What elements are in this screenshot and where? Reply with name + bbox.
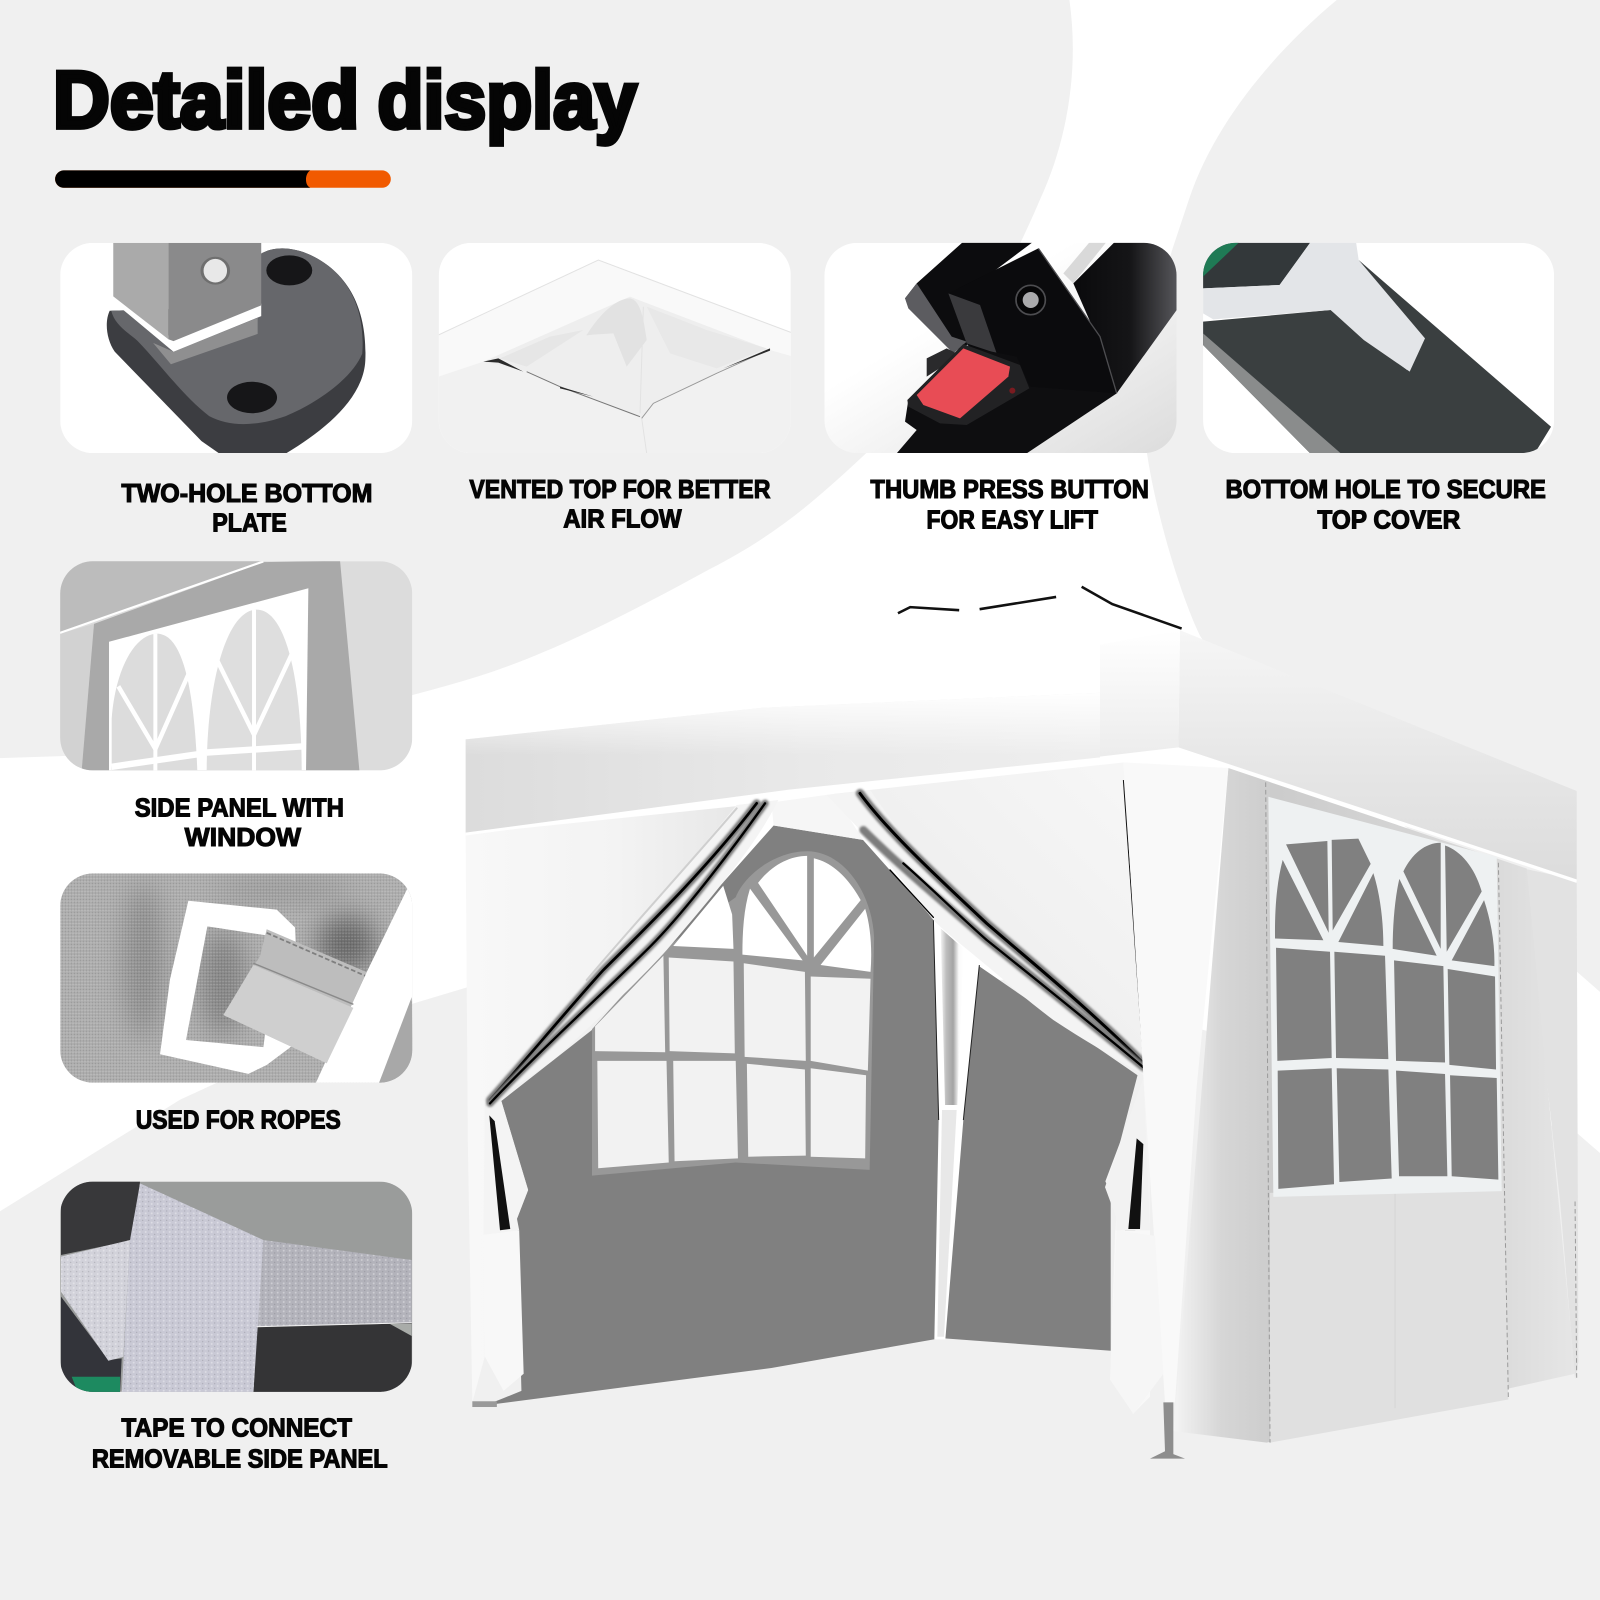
red button xyxy=(917,348,1010,418)
tent: right side xyxy=(1100,630,1578,1459)
right tied curtain xyxy=(1105,1075,1150,1230)
right curtain panel xyxy=(834,762,1144,1069)
caption: two-hole bottom plate xyxy=(121,480,372,538)
window frame xyxy=(592,851,874,1176)
right valance xyxy=(1178,630,1577,880)
caption: bottom hole top cover: TOP COVER xyxy=(1317,507,1460,535)
right tied curtain xyxy=(1105,1078,1150,1230)
corner foot xyxy=(1150,1402,1185,1459)
title xyxy=(53,56,637,146)
panel: thumb press button xyxy=(824,242,1177,453)
left foot xyxy=(472,1401,497,1407)
panel: vented top xyxy=(438,243,793,453)
caption: side panel with window: SIDE PANEL WITH xyxy=(135,794,344,822)
caption: used for ropes: USED FOR ROPES xyxy=(136,1107,341,1135)
white gap strips xyxy=(1063,242,1107,283)
valance trim xyxy=(466,754,1150,834)
rear block xyxy=(905,242,1033,352)
panel: two-hole bottom plate xyxy=(60,243,412,454)
caption: tape to connect: REMOVABLE SIDE PANEL xyxy=(92,1445,388,1473)
front bracket xyxy=(960,248,1117,394)
bolt xyxy=(1016,285,1045,315)
title underline bar xyxy=(55,170,391,188)
right trim xyxy=(1100,749,1577,881)
caption: vented top: VENTED TOP FOR BETTER xyxy=(469,476,770,504)
caption: bottom hole top cover: BOTTOM HOLE TO SECURE xyxy=(1226,476,1546,504)
panel: loop for ropes xyxy=(57,869,417,1086)
seams xyxy=(1266,782,1577,1443)
caption: side panel with window xyxy=(135,794,344,852)
right wall xyxy=(1173,768,1575,1443)
far right panel xyxy=(1523,869,1578,1379)
tent: left curtain fold band xyxy=(485,800,778,1105)
tent: roof vent xyxy=(898,587,1182,629)
tent: central pole xyxy=(933,918,979,1339)
front valance xyxy=(466,691,1150,834)
left curtain panel xyxy=(466,803,771,1402)
right tube xyxy=(1073,242,1177,393)
caption: tape to connect: TAPE TO CONNECT xyxy=(121,1415,352,1443)
button bezel xyxy=(907,344,1029,425)
left curtain tail xyxy=(483,1230,524,1391)
side window frame xyxy=(1268,797,1502,1197)
right curtain tail xyxy=(1110,1230,1163,1414)
panel: bottom hole top cover xyxy=(1203,243,1554,453)
tent: roof canopy xyxy=(466,587,1184,832)
caption: vented top: AIR FLOW xyxy=(563,506,683,534)
front roof corner xyxy=(1100,630,1180,757)
top gap between curtains xyxy=(771,794,863,840)
title: Detailed xyxy=(53,56,359,146)
caption: bottom hole top cover xyxy=(1226,476,1546,535)
caption: vented top xyxy=(469,476,770,534)
caption: thumb press button: FOR EASY LIFT xyxy=(927,507,1098,535)
panel: tape connector xyxy=(60,1182,412,1393)
right curtain tail xyxy=(1111,1230,1150,1414)
tent: right curtain fold band xyxy=(827,780,1145,1076)
left tied curtain xyxy=(483,1101,528,1235)
background: white swoosh xyxy=(0,0,1600,1211)
caption: two-hole bottom plate: PLATE xyxy=(212,510,287,538)
caption: tape to connect xyxy=(92,1415,388,1473)
title: display xyxy=(378,56,637,146)
window panes xyxy=(595,856,871,1168)
tent: front wall xyxy=(466,691,1150,1414)
caption: thumb press button xyxy=(870,476,1149,535)
caption: two-hole bottom plate: TWO-HOLE BOTTOM xyxy=(121,480,372,508)
caption: thumb press button: THUMB PRESS BUTTON xyxy=(870,476,1149,504)
valance top fade xyxy=(466,691,1150,834)
tent illustration xyxy=(466,587,1578,1459)
panel: side panel with window xyxy=(60,561,412,772)
lower housing xyxy=(897,347,1117,453)
corner panel xyxy=(1123,762,1228,1402)
back wall xyxy=(486,825,1138,1405)
caption: side panel with window: WINDOW xyxy=(185,824,302,852)
side window panes xyxy=(1275,839,1498,1189)
